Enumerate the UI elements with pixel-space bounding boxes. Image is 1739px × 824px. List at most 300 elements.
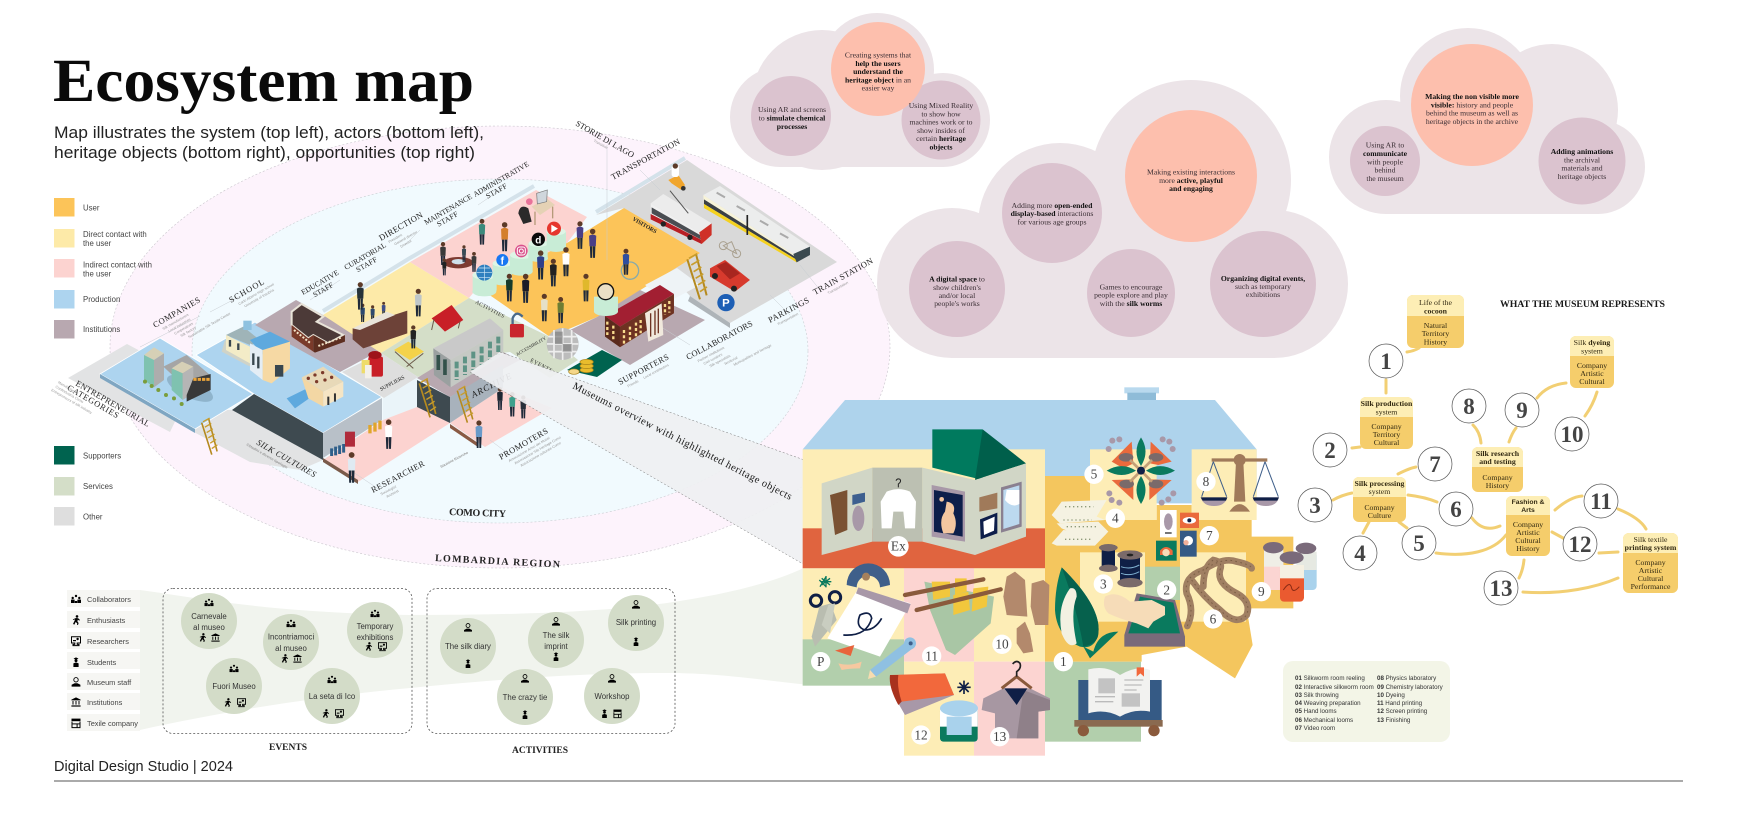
cards: Cultural <box>1579 377 1606 386</box>
opportunity cloud: visibility: visible: history and people <box>1431 100 1514 110</box>
label: storie di lago: STORIE DI LAGO <box>574 118 636 160</box>
label: silk cultures: Cittadini e diverse tipologie <box>246 443 288 470</box>
label: tiny territory note: Stazione Ricerche <box>440 451 469 469</box>
subtitle <box>54 123 484 162</box>
label: researcher: Archivist <box>386 489 399 499</box>
numbered nodes: 5 <box>1413 531 1425 556</box>
stone fragments <box>1003 572 1049 653</box>
school building <box>292 304 345 353</box>
icon: museum building <box>605 285 674 347</box>
cards: Life of the <box>1419 298 1452 307</box>
red folding book <box>432 305 463 332</box>
room list: 10 Dyeing <box>1377 692 1405 699</box>
cards: Performance <box>1631 582 1671 591</box>
opportunity cloud: engaging: Games to encourage <box>1100 282 1163 292</box>
institutions tile <box>255 300 381 372</box>
number markers: 10 <box>995 637 1009 652</box>
opportunity cloud: understand: certain heritage <box>916 134 966 143</box>
opportunity cloud: visibility: Making the non visible more <box>1425 92 1519 101</box>
label: companies: Cooperatives <box>174 322 194 336</box>
opportunity cloud: understand <box>730 13 990 170</box>
opportunity cloud: engaging: Adding more open-ended <box>1012 201 1093 210</box>
icon: parking sign: P <box>722 298 730 310</box>
label: silk cultures: SILK CULTURES <box>255 437 319 480</box>
colour legend: Production <box>83 295 120 304</box>
meeting table <box>440 242 476 275</box>
cards: printing system <box>1625 543 1677 552</box>
opportunity cloud: understand: easier way <box>862 84 894 92</box>
label: como city: COMO CITY <box>449 507 507 520</box>
cards: Company <box>1635 558 1666 567</box>
cards: Company <box>1577 361 1607 370</box>
label: collaborators: Silk specialists <box>709 354 731 368</box>
opportunity cloud: visibility <box>1329 28 1645 214</box>
label: direction <box>377 210 432 256</box>
room list: 03 Silk throwing <box>1295 692 1339 699</box>
label: promoters: Associazione Silk Heritage Como <box>514 435 562 465</box>
number markers: 7 <box>1206 528 1213 543</box>
numbered nodes: 6 <box>1450 497 1462 522</box>
label: parkings: PARKINGS <box>766 295 811 325</box>
chimney <box>1124 387 1159 401</box>
roller and jar <box>890 673 978 742</box>
subtitle: heritage objects (bottom right), opportunities (top right) <box>54 143 475 162</box>
cards: Arts <box>1521 507 1535 514</box>
opportunity cloud: understand: machines work or to <box>910 118 973 126</box>
number markers: Ex <box>891 539 906 554</box>
room list <box>1283 661 1450 742</box>
cards: Artistic <box>1639 566 1663 575</box>
direct contact tile <box>323 262 469 353</box>
room list: 12 Screen printing <box>1377 708 1428 715</box>
label: direction: Director <box>400 239 413 249</box>
label: supporters: Local contributors <box>643 363 670 380</box>
opportunity cloud: understand: Using AR and screens <box>758 105 826 114</box>
number markers: 9 <box>1258 584 1265 599</box>
cards: Company <box>1482 473 1513 482</box>
rope <box>1186 560 1252 626</box>
opportunity cloud: visibility: communicate <box>1363 149 1408 158</box>
numbered nodes: 4 <box>1354 541 1366 566</box>
label: entrepreneurial categories: Manufacturers <box>57 380 79 396</box>
opportunity cloud: engaging: for various age groups <box>1018 218 1086 226</box>
number markers: 2 <box>1163 582 1170 597</box>
shadow <box>163 369 217 407</box>
activities panel: The crazy tie <box>503 693 547 702</box>
opportunity cloud: understand: to show how <box>921 110 961 118</box>
opportunity cloud: understand: objects <box>929 142 953 152</box>
seated promoters <box>497 387 526 418</box>
opportunity cloud: engaging: with the silk worms <box>1100 299 1162 308</box>
colour legend: Supporters <box>83 452 121 460</box>
label: collaborators: Territorial <box>723 356 739 366</box>
label: events on map: EVENTS <box>529 357 553 374</box>
cards: History <box>1486 481 1509 490</box>
numbered nodes: 12 <box>1568 532 1592 557</box>
label: entrepreneurial categories: CATEGORIES <box>66 382 121 420</box>
opportunity cloud: engaging <box>877 80 1348 358</box>
numbered nodes: 8 <box>1463 394 1475 419</box>
lace chevrons <box>1052 500 1108 546</box>
archive building <box>433 318 503 387</box>
label: school: Carlo Alberto High school <box>238 282 275 306</box>
actor legend: Collaborators <box>87 595 131 604</box>
label: visitors: VISITORS <box>631 217 657 235</box>
number markers: 1 <box>1060 654 1067 669</box>
label: collaborators <box>684 315 772 385</box>
number markers: 3 <box>1100 576 1107 591</box>
room list: 11 Hand printing <box>1377 700 1423 707</box>
isometric system map <box>50 118 877 571</box>
opportunity cloud: engaging: such as temporary <box>1235 282 1291 291</box>
opportunity cloud: engaging: people's works <box>934 299 980 308</box>
representation network <box>1298 295 1678 605</box>
number markers: 4 <box>1112 511 1119 526</box>
opportunity cloud: understand: help the users <box>855 59 901 68</box>
red roll <box>362 351 383 378</box>
room list: 05 Hand looms <box>1295 708 1337 715</box>
map labels <box>50 118 877 571</box>
icon: tram <box>703 186 810 262</box>
label: administrative staff: ADMINISTRATIVE <box>472 159 531 199</box>
icon: parking sign <box>717 294 735 311</box>
label: entrepreneurial categories: ENTREPRENEURIAL <box>74 378 152 429</box>
label: train station: TRAIN STATION <box>811 256 875 297</box>
cards: Natural <box>1424 321 1448 330</box>
actor legend: Institutions <box>87 698 123 707</box>
opportunity cloud: visibility: with people <box>1367 158 1404 166</box>
connectors <box>1333 348 1646 593</box>
promoters tile <box>450 388 552 447</box>
label: school: SCHOOL <box>227 277 266 305</box>
colour legend: Indirect contact with <box>83 260 152 270</box>
events panel: al museo <box>275 644 307 653</box>
events panel: al museo <box>193 623 225 632</box>
opportunity cloud: understand: to simulate chemical <box>759 114 825 122</box>
opportunity cloud: visibility: behind <box>1375 166 1396 174</box>
rope twist <box>1186 560 1252 626</box>
cards: Territory <box>1422 329 1449 338</box>
number markers: P <box>817 654 824 669</box>
label: school: University of Insubria <box>244 288 275 308</box>
footer: Digital Design Studio | 2024 <box>54 759 233 775</box>
cards: History <box>1424 338 1447 346</box>
opportunity cloud: visibility: the museum <box>1366 174 1404 183</box>
open book <box>1074 667 1163 736</box>
label: companies: Silk manufacturers <box>162 313 190 331</box>
opportunity cloud: engaging: exhibitions <box>1246 290 1280 299</box>
opportunity cloud: engaging: Organizing digital events, <box>1221 274 1305 283</box>
researchers <box>348 419 482 483</box>
cards: Artistic <box>1580 369 1604 378</box>
factory two <box>287 367 343 408</box>
exhibition panels <box>822 429 1026 555</box>
blue production platforms <box>100 322 382 433</box>
zoom-2 scale illustrations <box>440 163 810 374</box>
opportunity cloud: understand: processes <box>777 122 807 131</box>
archive base <box>417 352 520 423</box>
opportunity cloud: understand: understand the <box>853 67 903 76</box>
opportunity cloud: understand: Creating systems that <box>845 50 912 60</box>
numbered nodes: 1 <box>1380 349 1392 374</box>
indirect contact tile <box>410 190 587 298</box>
icons: digital platform cylinders <box>472 222 566 296</box>
label: entrepreneurial categories <box>50 369 152 443</box>
icon: scooter <box>668 163 686 191</box>
activities heading: ACTIVITIES <box>512 746 568 756</box>
heritage house map <box>803 387 1317 756</box>
label: collaborators: Civil curators <box>703 352 723 366</box>
cards: History <box>1516 544 1540 553</box>
colour legend: the user <box>83 270 112 278</box>
cards: system <box>1376 408 1397 416</box>
cards: Silk research <box>1476 449 1520 458</box>
colour legend: Direct contact with <box>83 230 147 239</box>
printing tools <box>810 563 916 679</box>
office desk <box>518 190 555 225</box>
opportunity cloud: visibility: the archival <box>1564 156 1600 164</box>
activities panel: Silk printing <box>616 618 656 627</box>
label: promoters <box>497 422 564 475</box>
cards: cocoon <box>1424 306 1448 316</box>
activities panel <box>427 588 675 734</box>
cards: system <box>1581 346 1603 356</box>
room list: 09 Chemistry laboratory <box>1377 684 1444 691</box>
label: promoters: Associazione culturale Como <box>520 441 562 468</box>
label: companies: Silk factory <box>180 326 197 338</box>
ladders <box>202 379 473 455</box>
roof <box>803 400 1257 503</box>
icons: digital platform cylinders: d <box>535 235 541 246</box>
cards: Cultural <box>1515 536 1542 545</box>
room list: 02 Interactive silkworm room <box>1295 684 1374 691</box>
grey back plates <box>68 344 323 470</box>
colour legend <box>54 198 152 526</box>
activities panel: Workshop <box>595 692 630 701</box>
supporters tile <box>567 350 622 377</box>
label: curatorial staff: CURATORIAL <box>342 240 388 272</box>
room list: 06 Mechanical looms <box>1295 717 1353 724</box>
opportunity cloud: visibility: materials and <box>1561 164 1603 172</box>
label: entrepreneurial categories: Entrepreneurs of silk industry <box>50 388 93 415</box>
label: maintenance staff: STAFF <box>435 209 460 229</box>
cards: Territory <box>1373 430 1400 439</box>
actor legend: Texile company <box>87 719 138 728</box>
researcher tile <box>323 407 450 482</box>
numbered nodes <box>1298 344 1618 605</box>
numbered nodes: 10 <box>1560 422 1584 447</box>
label: school <box>227 273 277 313</box>
label: activities: ACTIVITIES <box>474 299 505 320</box>
label: entrepreneurial categories: Confindustria Como <box>55 385 84 404</box>
events panel: Temporary <box>357 622 394 631</box>
number markers <box>811 465 1271 746</box>
cards: Fashion & <box>1512 499 1545 506</box>
events panel: Fuori Museo <box>212 682 256 691</box>
cards: Cultural <box>1374 438 1400 447</box>
band caption: Museums overview with highlighted heritage objects <box>571 381 794 503</box>
actor legend: Enthusiasts <box>87 616 126 625</box>
opportunity cloud: engaging: display-based interactions <box>1011 209 1093 218</box>
number markers: 8 <box>1203 474 1210 489</box>
label: archive: ARCHIVE <box>468 371 514 400</box>
events panel: Carnevale <box>191 612 227 621</box>
entrepreneurial building <box>143 347 211 406</box>
room list: 01 Silkworm room reeling <box>1295 675 1365 682</box>
visitors tile <box>478 208 700 337</box>
events heading: EVENTS <box>269 743 307 753</box>
leaf and silkworm <box>1055 567 1118 658</box>
numbered nodes: 2 <box>1324 438 1336 463</box>
label: direction: DIRECTION <box>377 210 424 243</box>
icons: digital platform cylinders: f <box>501 255 505 267</box>
opportunity cloud: engaging: Making existing interactions <box>1147 168 1235 176</box>
label: collaborators: Municipalities and heritage <box>733 343 772 367</box>
label: accessibility: ACCESSIBILITY <box>515 335 548 357</box>
label: companies <box>151 284 232 351</box>
cards: Silk textile <box>1633 535 1668 544</box>
opportunity cloud: engaging: show children's <box>933 283 981 292</box>
label: maintenance staff: MAINTENANCE <box>422 192 474 227</box>
opportunity cloud: engaging: A digital space to <box>929 274 985 284</box>
label: supporters: SUPPORTERS <box>616 352 671 387</box>
number markers: 13 <box>993 729 1007 744</box>
activities panel: imprint <box>544 642 569 651</box>
label: researcher: RESEARCHER <box>369 458 426 495</box>
flower ornament <box>1106 436 1176 506</box>
numbered nodes: 9 <box>1516 398 1528 423</box>
colour legend: Services <box>83 482 113 491</box>
numbered nodes: 11 <box>1590 489 1612 514</box>
table with worker <box>394 325 424 368</box>
cards: Silk production <box>1361 399 1413 408</box>
label: companies: COMPANIES <box>151 294 202 330</box>
cards: Culture <box>1368 511 1392 520</box>
label: storie di lago: Transition <box>593 139 608 150</box>
label: educative staff: EDUCATIVE <box>300 268 341 297</box>
room list: 08 Physics laboratory <box>1377 675 1437 682</box>
room list: 13 Finishing <box>1377 717 1411 724</box>
opportunity cloud: understand: Using Mixed Reality <box>909 101 973 110</box>
cards: Company <box>1371 422 1402 431</box>
people: visitors <box>479 219 639 323</box>
label: curatorial staff: STAFF <box>354 255 379 274</box>
ellipse: Como city <box>192 179 808 523</box>
cards <box>1353 295 1678 593</box>
jacket on hanger <box>982 661 1050 738</box>
label: lombardia region: LOMBARDIA REGION <box>435 553 561 571</box>
activities panel: The silk diary <box>445 642 491 651</box>
label: companies: Local industries <box>168 317 191 333</box>
number markers: 12 <box>914 727 928 742</box>
cards: Company <box>1513 520 1543 529</box>
heading: what the museum represents: WHAT THE MUSEUM REPRESENTS <box>1500 299 1666 310</box>
cards: Company <box>1364 503 1395 512</box>
icon: bus <box>651 191 712 244</box>
opportunity cloud: understand: show insides of <box>917 126 965 135</box>
opportunity cloud: engaging: people explore and play <box>1094 290 1168 300</box>
label: companies: Sustainable Silk Textile Center <box>187 311 232 339</box>
label: direction: President <box>388 233 403 244</box>
icon: coins <box>569 359 593 374</box>
label: promoters: PROMOTERS <box>497 425 550 462</box>
zoom-10 scale illustrations <box>143 282 526 483</box>
label: supporters: Friends <box>627 379 639 388</box>
numbered nodes: 13 <box>1490 576 1512 601</box>
opportunity cloud: understand: heritage object in an <box>845 76 911 84</box>
silk bucket <box>905 578 1001 655</box>
footer rule <box>54 780 1683 782</box>
scale <box>1201 454 1279 512</box>
number markers: 5 <box>1091 467 1098 482</box>
cards: Artistic <box>1516 528 1540 537</box>
colour legend: User <box>83 204 100 212</box>
number markers: 11 <box>925 648 938 663</box>
label: transportation: TRANSPORTATION <box>609 136 682 182</box>
title: Ecosystem map <box>53 48 474 115</box>
label: administrative staff: STAFF <box>484 181 509 201</box>
label: educative staff: STAFF <box>311 280 335 299</box>
label: parkings: Transportation <box>777 312 799 326</box>
overview connector band <box>470 352 810 568</box>
opportunity cloud: visibility: heritage objects <box>1558 172 1606 181</box>
cards: system <box>1369 487 1390 496</box>
events panel: exhibitions <box>357 633 394 642</box>
opportunity cloud: engaging: and/or local <box>939 291 975 300</box>
ellipse: Lombardia region <box>110 126 890 568</box>
silk dot pattern <box>1063 507 1098 539</box>
factory one <box>222 321 290 383</box>
label: collaborators: Partner institutions <box>697 346 725 363</box>
room list: 07 Video room <box>1295 725 1335 732</box>
suppliers tile <box>342 353 418 398</box>
actor legend: Museum staff <box>87 678 132 687</box>
icon: disco ball <box>547 328 579 360</box>
tiles <box>803 449 1293 756</box>
opportunity cloud: engaging: more active, playful <box>1159 176 1223 185</box>
institutions tile right <box>570 290 705 365</box>
events panel: Incontriamoci <box>268 632 314 642</box>
label: suppliers: SUPPLIERS <box>379 375 406 393</box>
screen print hand <box>1104 593 1185 647</box>
icon: red car <box>710 260 750 292</box>
numbered nodes: 3 <box>1309 493 1321 518</box>
cards: and testing <box>1479 457 1516 466</box>
colour legend: Institutions <box>83 325 120 334</box>
cards: Silk processing <box>1355 479 1405 488</box>
label: promoters: Associazione Amici dei Musei <box>508 436 551 463</box>
books <box>332 421 380 456</box>
video room cards <box>1156 510 1199 561</box>
thread spools <box>1099 544 1143 587</box>
colour legend: the user <box>83 239 112 248</box>
icon: ladder <box>687 254 707 299</box>
services tile <box>381 298 578 378</box>
walls <box>100 374 417 460</box>
chemical bottles <box>1263 542 1317 602</box>
numbered nodes: 7 <box>1429 452 1441 477</box>
activities panel: The silk <box>543 631 570 640</box>
lock <box>510 314 524 337</box>
label: researcher: Sociologist <box>380 485 397 496</box>
actors band <box>140 565 810 730</box>
audience desk <box>353 302 407 348</box>
standing presenters <box>357 282 422 316</box>
icon: bicycle <box>719 242 741 258</box>
cards: Silk dyeing <box>1574 338 1610 347</box>
opportunity cloud: engaging: and engaging <box>1169 184 1213 193</box>
opportunity cloud: visibility: behind the museum as well as <box>1426 108 1518 118</box>
